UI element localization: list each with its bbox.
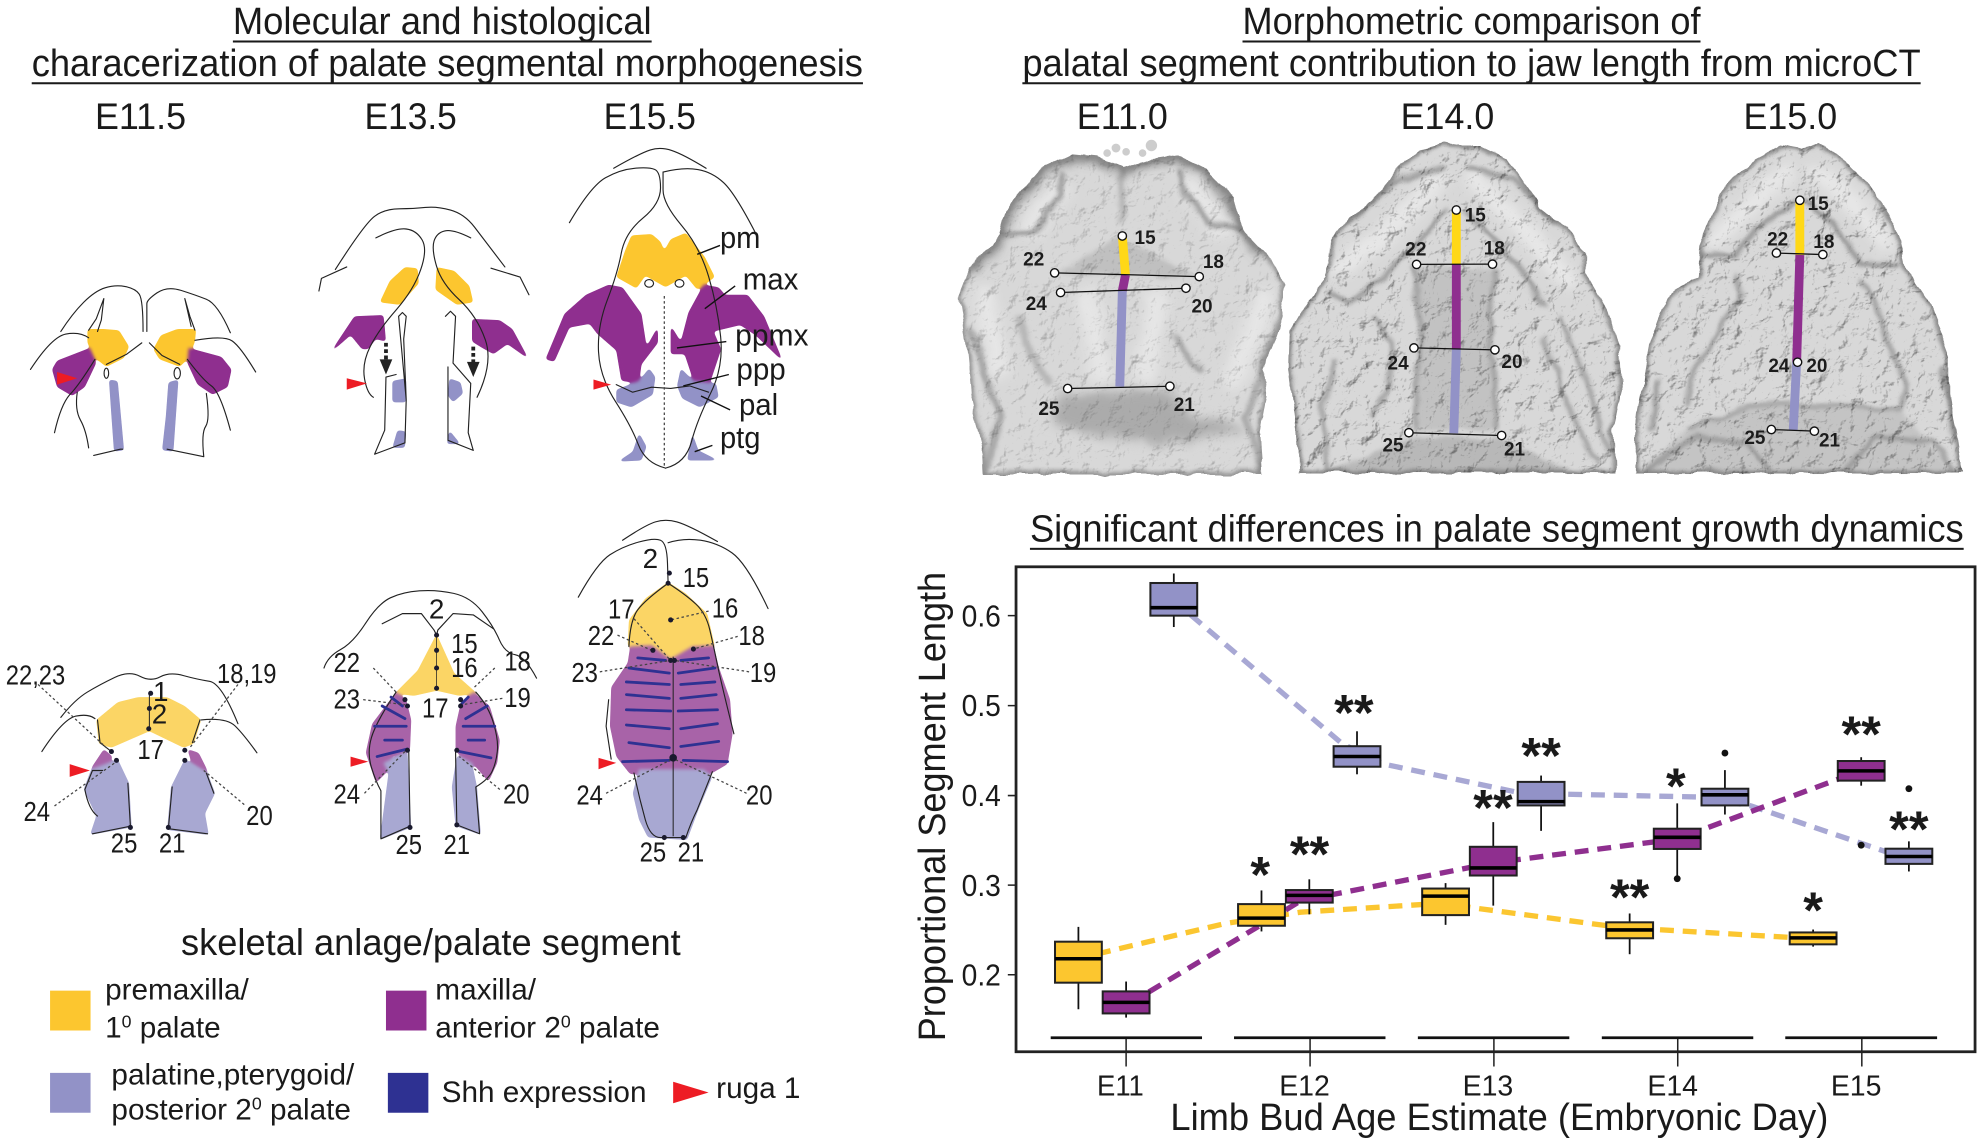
icon: red arrowhead (351, 757, 368, 767)
icon: red arrowhead (599, 758, 616, 769)
x axis title: Limb Bud Age Estimate (Embryonic Day) (1170, 1097, 1828, 1139)
legend item: ruga 1 (673, 1072, 800, 1105)
landmark numbers: 24 (1388, 353, 1409, 374)
plot frame (1016, 567, 1975, 1052)
panel: E11.5 palate landmarks: 24 (23, 796, 50, 827)
landmark numbers: 18 (1813, 232, 1834, 253)
labels: anatomical abbreviations: ppmx (735, 317, 809, 352)
legend item: palatine (50, 1058, 355, 1127)
landmark numbers (1744, 194, 1841, 452)
icon: red arrowhead (70, 764, 90, 777)
y axis ticks and labels (962, 600, 1016, 993)
panel: E13.5 palate landmarks: 23 (333, 684, 360, 715)
legend item: maxilla: palate (571, 1011, 660, 1044)
significance stars (1250, 684, 1929, 938)
significance stars: ** (1841, 706, 1881, 763)
legend item: Shh expression: Shh expression (442, 1076, 647, 1109)
heading: significant differences: Significant differences in palate segment growth dynamics (1030, 509, 1964, 551)
trend line: maxilla (1149, 778, 1841, 992)
panel: E15.5 palate landmarks: 23 (571, 657, 598, 688)
panel: E15.5 palate landmarks: 24 (576, 780, 603, 811)
arrow: right dashed down (467, 347, 480, 377)
panel: E13.5 palate landmarks: 24 (333, 778, 360, 809)
icon: red arrowhead ruga 1 (57, 372, 77, 385)
labels: anatomical abbreviations: ptg (720, 420, 760, 455)
legend item: premaxilla (50, 974, 250, 1044)
landmark numbers: 25 (1038, 399, 1060, 420)
y axis ticks and labels: 0.5 (962, 690, 1001, 723)
landmark numbers (1023, 228, 1224, 420)
significance stars: * (1803, 881, 1823, 938)
panel: E15.5 palate landmarks: 25 (640, 837, 666, 868)
significance stars: * (1250, 846, 1270, 903)
landmark numbers: 24 (1026, 294, 1047, 315)
legend item: premaxilla: palate (131, 1011, 221, 1044)
stage labels: diagrams (95, 96, 696, 137)
panel: E15.5 palate landmarks: 2 (643, 543, 658, 574)
trend line: posterior palate (1191, 615, 1885, 851)
panel: E15.5 palate landmarks: 22 (588, 620, 614, 651)
title: molecular and histological characterization: Molecular and histological (233, 1, 652, 43)
title: molecular and histological characterization (32, 1, 863, 85)
x axis ticks and labels (1097, 1039, 1881, 1103)
panel: E11.5 palate landmarks: 21 (159, 828, 185, 859)
landmark numbers: 21 (1174, 395, 1195, 416)
landmark numbers: 22 (1405, 240, 1426, 261)
E-stage baseline bars (1051, 1037, 1937, 1039)
legend item: maxilla: 0 (561, 1011, 571, 1031)
landmark numbers: 22 (1767, 229, 1788, 250)
legend item: palatine: posterior 2 (111, 1094, 252, 1127)
title: morphometric comparison: palatal segment contribution to jaw length from microCT (1022, 43, 1921, 85)
segment measure lines (1767, 196, 1827, 435)
legend item: maxilla: anterior 2 (435, 1011, 561, 1044)
panel: E11.5 skeletal anlage diagram (30, 286, 256, 457)
stage labels: diagrams: E15.5 (604, 96, 696, 137)
x axis ticks and labels: E11 (1097, 1071, 1144, 1103)
landmark numbers: 15 (1808, 194, 1829, 215)
chart: proportional segment length box plot (912, 567, 1975, 1139)
stage labels: diagrams: E13.5 (364, 96, 457, 137)
y axis title: Proportional Segment Length (912, 572, 954, 1041)
landmark numbers: 20 (1191, 297, 1213, 318)
panel: E13.5 palate landmarks: 22 (333, 647, 360, 678)
legend item: Shh expression (388, 1073, 647, 1113)
significance stars: ** (1610, 869, 1650, 926)
panel: E13.5 palate landmarks: 15 (451, 628, 478, 659)
landmark numbers: 15 (1465, 205, 1486, 226)
legend item: maxilla (386, 974, 660, 1044)
panel: microCT E14.0 (1284, 139, 1626, 481)
panel: E11.5 palate landmarks (6, 658, 277, 859)
stage labels: microCT: E14.0 (1401, 96, 1494, 137)
panel: E15.5 palate landmarks: 16 (712, 592, 738, 623)
landmark numbers: 18 (1484, 238, 1505, 259)
panel: E11.5 palate landmarks: 18,19 (217, 658, 277, 689)
panel: E11.5 palate landmarks: 1 (153, 676, 169, 707)
legend: skeletal anlage / palate segment (50, 922, 800, 1127)
panel: E11.5 palate landmarks: 2 (152, 699, 167, 730)
panel: E15.5 skeletal anlage diagram (545, 148, 809, 468)
panel: E13.5 palate landmarks: 16 (451, 652, 478, 683)
panel: E11.5 palate landmarks: 22,23 (6, 659, 65, 690)
legend item: palatine: 0 (252, 1094, 262, 1114)
icon: red arrowhead (347, 378, 367, 390)
legend item: premaxilla: 1 (105, 1011, 122, 1044)
legend item: palatine: palate (262, 1094, 351, 1127)
legend item: palatine: palatine,pterygoid/ (111, 1058, 355, 1091)
landmark numbers (1383, 205, 1526, 460)
x axis ticks and labels: E15 (1831, 1071, 1881, 1103)
segment measure lines (1050, 232, 1203, 393)
panel: microCT E15.0 (1626, 139, 1967, 481)
significance stars: * (1666, 757, 1686, 814)
y axis ticks and labels: 0.6 (962, 600, 1001, 633)
y axis ticks and labels: 0.2 (962, 960, 1001, 993)
arrow: left dashed down (380, 343, 392, 374)
significance stars: ** (1473, 779, 1513, 836)
panel: E15.5 palate landmarks (571, 520, 776, 868)
panel: E15.5 palate landmarks: 18 (738, 620, 765, 651)
landmark numbers: 25 (1383, 436, 1404, 457)
segment measure lines (1405, 206, 1506, 440)
legend item: premaxilla: 0 (122, 1011, 132, 1031)
panel: E15.5 palate landmarks: 15 (683, 562, 709, 593)
landmark numbers: 18 (1203, 252, 1224, 273)
boxes: premaxilla (1055, 883, 1837, 1009)
legend item: ruga 1: ruga 1 (716, 1072, 800, 1105)
stage labels: diagrams: E11.5 (95, 96, 186, 137)
legend item: premaxilla: premaxilla/ (105, 974, 250, 1007)
landmark numbers: 21 (1504, 439, 1526, 460)
panel: E15.5 palate landmarks: 20 (746, 780, 772, 811)
panel: E13.5 palate landmarks: 21 (444, 829, 470, 860)
labels: anatomical abbreviations (677, 220, 809, 455)
stage labels: microCT: E11.0 (1077, 96, 1168, 137)
significance stars: ** (1889, 800, 1929, 857)
panel: E13.5 skeletal anlage diagram (319, 207, 529, 454)
landmark numbers: 15 (1135, 228, 1156, 249)
boxes: posterior palate (1150, 574, 1932, 871)
panel: E15.5 palate landmarks: 19 (750, 657, 776, 688)
panel: E13.5 palate landmarks: 17 (422, 692, 449, 723)
labels: anatomical abbreviations: pal (739, 387, 778, 422)
boxes: maxilla (1103, 757, 1885, 1018)
panel: E13.5 palate landmarks: 2 (429, 594, 444, 625)
landmark numbers: 25 (1744, 428, 1766, 449)
trend line: premaxilla (1097, 903, 1792, 954)
x axis ticks and labels: E13 (1463, 1071, 1513, 1103)
title: morphometric comparison: Morphometric comparison of (1243, 1, 1701, 43)
landmark numbers: 22 (1023, 250, 1044, 271)
panel: E15.5 palate landmarks: 17 (608, 594, 635, 625)
legend: skeletal anlage / palate segment: skeletal anlage/palate segment (181, 922, 681, 963)
panel: E11.5 palate landmarks: 20 (246, 800, 273, 831)
x axis ticks and labels: E14 (1647, 1071, 1698, 1103)
significance stars: ** (1521, 727, 1561, 784)
labels: anatomical abbreviations: ppp (736, 352, 786, 387)
significance stars: ** (1334, 684, 1374, 741)
labels: anatomical abbreviations: pm (720, 220, 760, 255)
stage labels: microCT (1077, 96, 1837, 137)
landmark numbers: 21 (1819, 431, 1841, 452)
panel: E13.5 palate landmarks: 25 (395, 829, 422, 860)
panel: E11.5 palate landmarks: 17 (137, 734, 164, 765)
panel: E11.5 palate landmarks: 25 (111, 828, 137, 859)
legend item: maxilla: maxilla/ (435, 974, 537, 1007)
title: molecular and histological characterization: characerization of palate segmental morphogenesis (32, 43, 863, 85)
significance stars: ** (1290, 826, 1330, 883)
landmark numbers: 20 (1501, 352, 1523, 373)
panel: E15.5 palate landmarks: 21 (678, 837, 704, 868)
stage labels: microCT: E15.0 (1744, 96, 1837, 137)
landmark numbers: 20 (1806, 356, 1827, 377)
x axis ticks and labels: E12 (1279, 1071, 1330, 1103)
panel: E13.5 palate landmarks: 18 (504, 646, 531, 677)
outliers (1674, 750, 1912, 882)
panel: microCT E11.0 (949, 139, 1291, 481)
title: morphometric comparison (1022, 1, 1921, 85)
labels: anatomical abbreviations: max (743, 262, 799, 297)
y axis ticks and labels: 0.3 (962, 870, 1001, 903)
panel: E13.5 palate landmarks: 20 (503, 778, 530, 809)
panel: E13.5 palate landmarks: 19 (504, 682, 531, 713)
icon: red arrowhead (593, 380, 611, 390)
landmark numbers: 24 (1768, 356, 1790, 377)
panel: E13.5 palate landmarks (324, 591, 537, 860)
y axis ticks and labels: 0.4 (962, 780, 1001, 813)
